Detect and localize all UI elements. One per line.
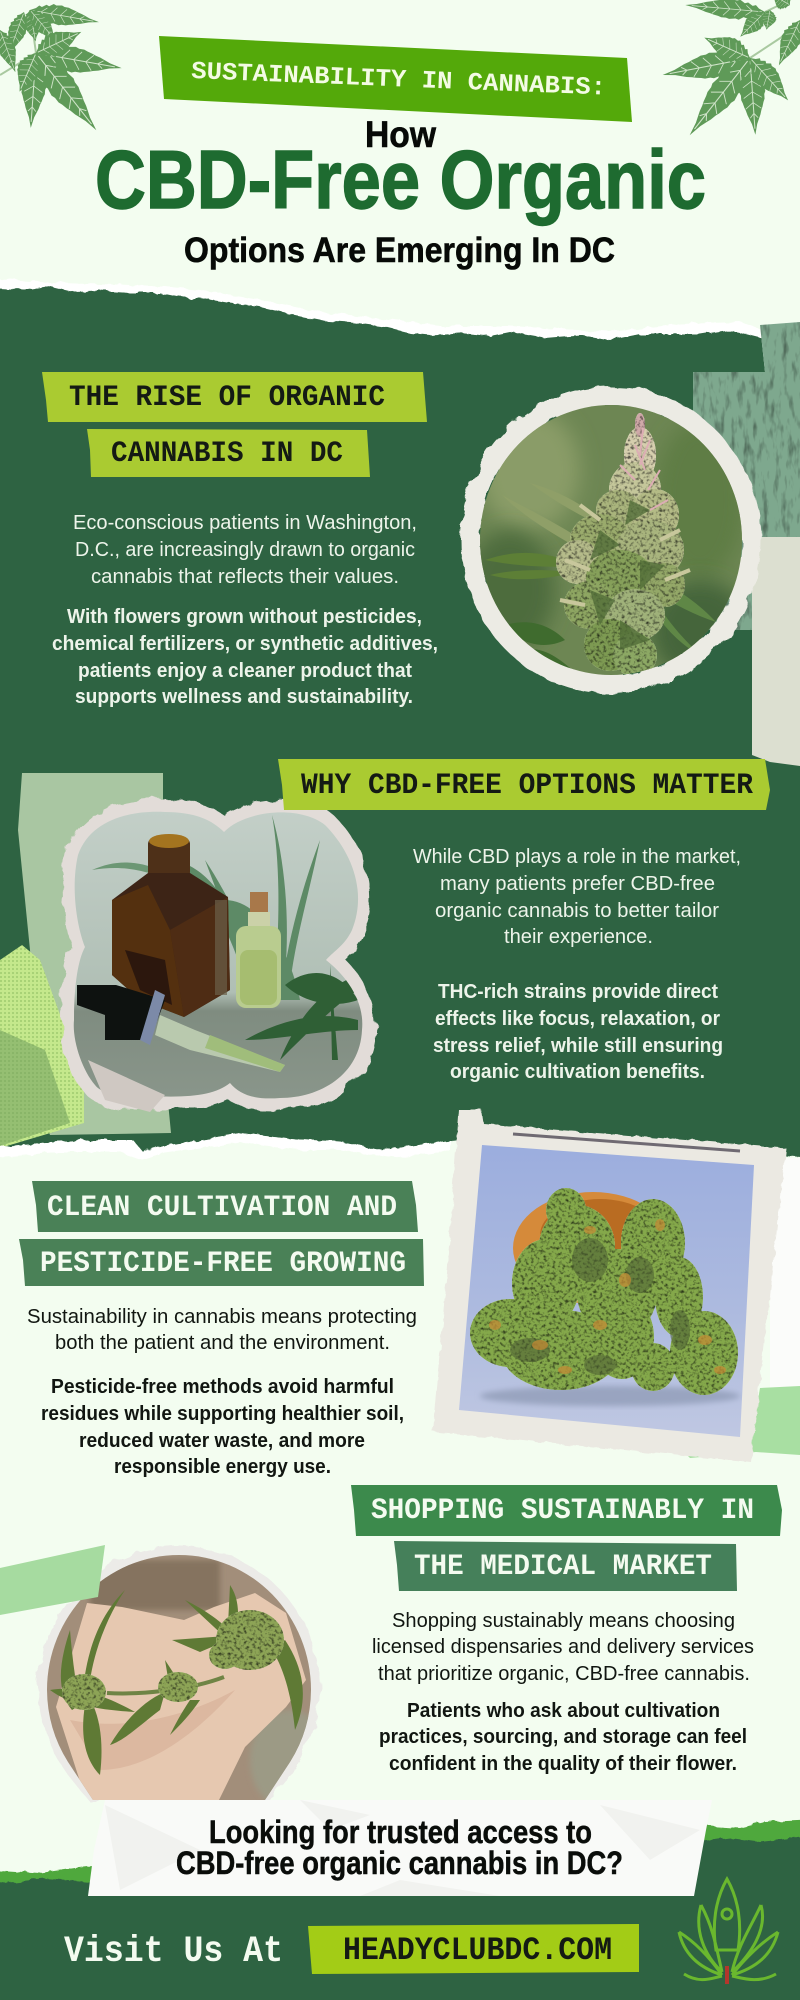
callout text: Looking for trusted access to	[209, 1814, 592, 1850]
panel: dark green section	[0, 286, 800, 1158]
text: shopping sustainably body: Patients who ask about cultivation	[407, 1700, 720, 1722]
tape	[278, 759, 770, 810]
tape label: SUSTAINABILITY IN CANNABIS:	[191, 57, 607, 103]
text: clean cultivation body: reduced water waste, and more	[79, 1430, 365, 1452]
heading: the rise of organic cannabis in dc	[42, 372, 427, 477]
panel: pale strips right	[684, 1158, 800, 1458]
heading text: WHY CBD-FREE OPTIONS MATTER	[301, 769, 753, 803]
photo: buds in hand torn oval	[0, 1545, 330, 1810]
torn frame	[38, 1546, 320, 1800]
heading: shopping sustainably in the medical market	[351, 1485, 782, 1591]
heading: why cbd-free options matter	[278, 759, 770, 810]
text: shopping sustainably body	[372, 1610, 754, 1775]
url tape	[308, 1924, 639, 1974]
photo content	[450, 1140, 760, 1440]
text: rise of organic body: Eco-conscious patients in Washington,	[73, 512, 417, 534]
text: rise of organic body: D.C., are increasingly drawn to organic	[75, 539, 415, 561]
text: rise of organic body: patients enjoy a cleaner product that	[78, 660, 412, 682]
text: why cbd-free body: stress relief, while still ensuring	[433, 1035, 723, 1057]
icon: cannabis leaf top right	[660, 0, 800, 144]
text: shopping sustainably body: confident in the quality of their flower.	[389, 1753, 737, 1775]
heading line 1: THE RISE OF ORGANIC	[69, 381, 385, 415]
green tape strip	[684, 1386, 800, 1458]
visit text: Visit Us At	[64, 1931, 283, 1973]
callout text line 2: CBD-free organic cannabis in DC?	[176, 1845, 623, 1881]
crumpled paper	[88, 1800, 712, 1896]
heading: clean cultivation and pesticide-free growing	[19, 1181, 424, 1286]
texture patch green	[693, 322, 800, 630]
text: rise of organic body	[52, 512, 438, 708]
crumple shading	[105, 1800, 700, 1896]
text: clean cultivation body: both the patient and the environment.	[55, 1332, 390, 1354]
tape line 1	[32, 1181, 418, 1232]
pale green patch	[18, 773, 171, 1135]
photo: cannabis plant in torn oval	[465, 395, 755, 685]
heading line 1: CLEAN CULTIVATION AND	[47, 1191, 397, 1225]
title line 3: Options Are Emerging In DC	[184, 231, 615, 270]
texture patch beige	[752, 537, 800, 766]
title block	[95, 36, 706, 270]
torn frame	[471, 396, 751, 684]
panel: paper patches left	[0, 773, 171, 1148]
tape line 2	[19, 1239, 424, 1286]
icon: heady club logo	[679, 1879, 778, 1984]
text: shopping sustainably body: licensed dispensaries and delivery services	[372, 1636, 754, 1658]
dark green footer	[0, 1836, 800, 2000]
text: rise of organic body: With flowers grown without pesticides,	[67, 606, 422, 628]
text: why cbd-free body: THC-rich strains provide direct	[438, 981, 718, 1003]
text: shopping sustainably body: practices, sourcing, and storage can feel	[379, 1726, 747, 1748]
text: why cbd-free body	[413, 846, 741, 1083]
text: rise of organic body: cannabis that reflects their values.	[91, 566, 399, 588]
text: why cbd-free body: their experience.	[504, 926, 653, 948]
text: why cbd-free body: effects like focus, relaxation, or	[435, 1008, 720, 1030]
photo content	[47, 1555, 311, 1800]
text: clean cultivation body: responsible energy use.	[114, 1456, 331, 1478]
photo: cannabis buds in paper frame	[433, 1110, 786, 1462]
lime halftone patch	[0, 945, 84, 1148]
text: why cbd-free body: organic cultivation benefits.	[450, 1061, 705, 1083]
frame tape marks	[513, 1134, 740, 1151]
tape line 2	[394, 1541, 737, 1591]
paper frame	[433, 1110, 786, 1462]
heading line 2: PESTICIDE-FREE GROWING	[40, 1247, 406, 1281]
callout: trusted access note	[88, 1800, 712, 1896]
torn frame	[74, 812, 362, 1098]
tape: sustainability	[159, 36, 632, 122]
panel: textured paper patches right	[693, 322, 800, 766]
photo content	[74, 812, 362, 1098]
url text: HEADYCLUBDC.COM	[343, 1932, 612, 1969]
heading line 2: THE MEDICAL MARKET	[414, 1550, 712, 1584]
text: clean cultivation body	[27, 1306, 417, 1478]
heading line 2: CANNABIS IN DC	[111, 437, 343, 471]
title line 2: CBD-Free Organic	[95, 133, 706, 226]
footer: visit us at	[64, 1924, 639, 1974]
heading line 1: SHOPPING SUSTAINABLY IN	[371, 1494, 754, 1528]
panel: footer torn bands	[0, 1820, 800, 2000]
bright green band	[0, 1864, 110, 1910]
tape line 1	[42, 372, 427, 422]
lime patch shade	[0, 1030, 70, 1146]
bright green band right	[690, 1820, 800, 1860]
text: shopping sustainably body: Shopping sustainably means choosing	[392, 1610, 735, 1632]
text: why cbd-free body: organic cannabis to better tailor	[435, 900, 719, 922]
white paper strip	[770, 1158, 800, 1388]
torn paper edge second	[0, 1133, 450, 1160]
icon: cannabis leaf top left	[0, 0, 124, 139]
title line 1: How	[365, 114, 436, 155]
photo: oil bottles in torn clover	[60, 800, 380, 1112]
text: clean cultivation body: Sustainability in cannabis means protecting	[27, 1306, 417, 1328]
text: rise of organic body: chemical fertilizers, or synthetic additives,	[52, 633, 438, 655]
newsprint scrap	[88, 1060, 165, 1112]
text: shopping sustainably body: that prioritize organic, CBD-free cannabis.	[378, 1663, 750, 1685]
text: clean cultivation body: Pesticide-free methods avoid harmful	[51, 1376, 394, 1398]
photo content	[480, 405, 742, 675]
text: why cbd-free body: many patients prefer CBD-free	[440, 873, 715, 895]
tape line 1	[351, 1485, 782, 1536]
tape line 2	[87, 429, 370, 477]
text: clean cultivation body: residues while supporting healthier soil,	[41, 1403, 404, 1425]
green tape strip	[0, 1545, 105, 1615]
torn paper edge white	[0, 279, 800, 400]
text: rise of organic body: supports wellness and sustainability.	[75, 686, 413, 708]
text: why cbd-free body: While CBD plays a role in the market,	[413, 846, 741, 868]
